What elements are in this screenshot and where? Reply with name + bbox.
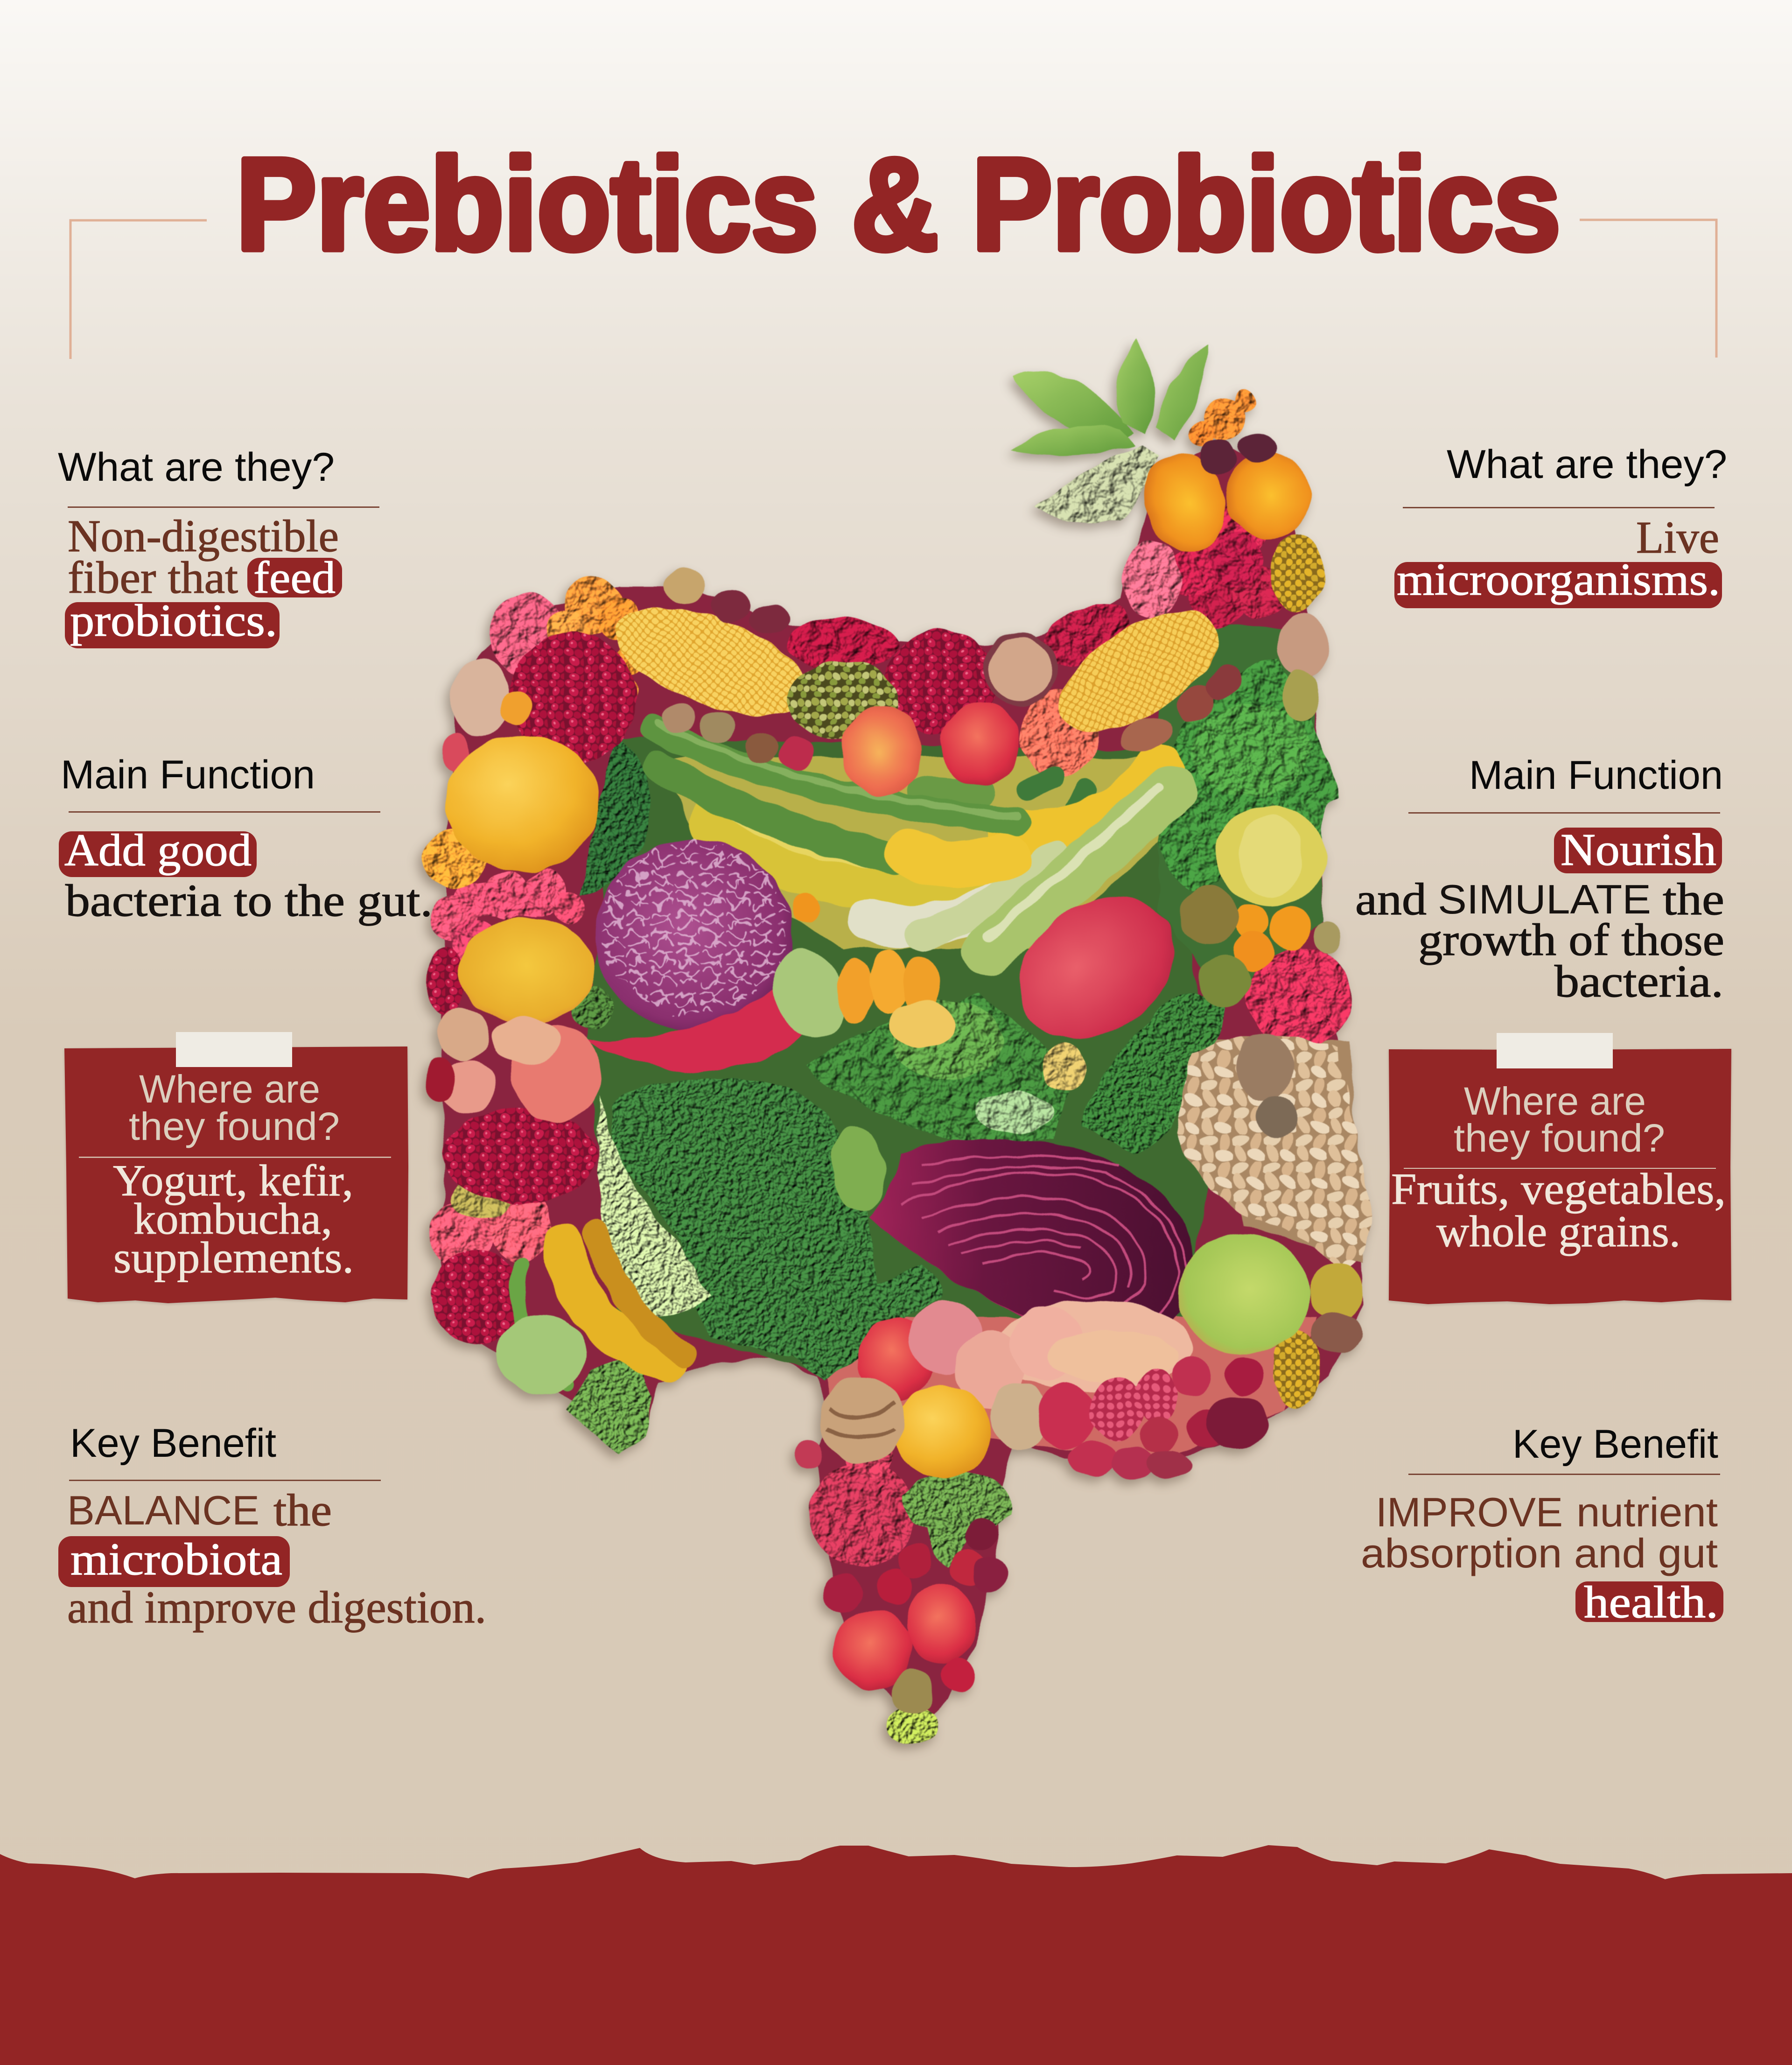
heading: main function: Main Function bbox=[61, 752, 315, 797]
panel: where found note, right bbox=[1389, 1033, 1731, 1304]
heading: what are they: What are they? bbox=[58, 445, 335, 490]
fruits and vegetables smooth pieces bbox=[425, 433, 1340, 1715]
panel: where found note, left: kombucha, bbox=[133, 1194, 332, 1243]
red cabbage whole bbox=[595, 839, 793, 1031]
text: balance: BALANCE bbox=[67, 1487, 259, 1533]
text: improve nutrient: IMPROVE bbox=[1376, 1489, 1563, 1535]
text: growth of those: growth of those bbox=[1418, 915, 1724, 965]
panel: prebiotic definition, left bbox=[58, 445, 379, 648]
panel: where found note, left: supplements. bbox=[113, 1233, 354, 1282]
berries bbox=[794, 1356, 1269, 1693]
stems, beans and bananas bbox=[518, 723, 1172, 1383]
heading: key benefit: Key Benefit bbox=[1512, 1422, 1718, 1467]
heading: what are they: What are they? bbox=[1447, 442, 1727, 487]
note heading: Where are bbox=[1464, 1079, 1646, 1123]
crumpled and leafy produce bbox=[423, 390, 1352, 1567]
top leaves bbox=[1010, 340, 1209, 455]
panel: key benefit, left bbox=[58, 1421, 486, 1632]
heading: main function: Main Function bbox=[1469, 753, 1723, 798]
panel: key benefit, right: nutrient bbox=[1576, 1489, 1718, 1535]
seeds, corn, grains bbox=[427, 534, 1372, 1409]
gut base regions bbox=[441, 441, 1363, 1725]
text: bacteria: bacteria. bbox=[1554, 956, 1723, 1006]
panel: main function, right: the bbox=[1663, 874, 1724, 924]
panel: key benefit, left: the bbox=[273, 1485, 332, 1535]
panel: main function, right bbox=[1355, 753, 1724, 1006]
text: add good: Add good bbox=[64, 825, 252, 875]
title bracket right bbox=[1580, 220, 1716, 358]
tape bbox=[176, 1032, 292, 1067]
text: absorption and gut: absorption and gut bbox=[1361, 1530, 1718, 1576]
panel: where found note, right: they found? bbox=[1454, 1116, 1665, 1160]
panel: where found note, left: they found? bbox=[129, 1104, 340, 1148]
text: feed: feed bbox=[253, 553, 336, 603]
panel: main function, left bbox=[59, 752, 433, 926]
text: health: health. bbox=[1584, 1577, 1718, 1627]
text: and simulate the: and bbox=[1355, 874, 1427, 924]
text: non-digestible: Non-digestible bbox=[68, 511, 339, 561]
panel: where found note, right: whole grains. bbox=[1436, 1207, 1680, 1256]
panel: where found note, left bbox=[64, 1032, 408, 1303]
panel: main function, right: SIMULATE bbox=[1438, 876, 1651, 922]
text: bacteria to the gut: bacteria to the gut. bbox=[65, 876, 433, 926]
panel: key benefit, right bbox=[1361, 1422, 1723, 1627]
text: microorganisms: microorganisms. bbox=[1397, 555, 1720, 604]
text: and improve digestion: and improve digestion. bbox=[67, 1582, 486, 1632]
text: microbiota: microbiota bbox=[70, 1534, 282, 1584]
note heading: Where are bbox=[139, 1067, 320, 1111]
tape bbox=[1497, 1033, 1613, 1068]
bottom torn band bbox=[0, 1845, 1792, 2065]
note body: Yogurt, kefir, bbox=[113, 1156, 353, 1205]
text: fiber that: fiber that bbox=[68, 553, 238, 603]
text: probiotics: probiotics. bbox=[70, 596, 277, 646]
title bracket left bbox=[70, 220, 207, 359]
title: Prebiotics & Probiotics bbox=[236, 132, 1561, 277]
note body: Fruits, vegetables, bbox=[1391, 1164, 1726, 1214]
text: live: Live bbox=[1636, 513, 1719, 562]
panel: probiotic definition, right bbox=[1394, 442, 1727, 608]
text: nourish: Nourish bbox=[1561, 825, 1716, 875]
broccoli and kale bbox=[566, 738, 1225, 1745]
heading: key benefit: Key Benefit bbox=[70, 1421, 276, 1466]
gut illustration made of fruit and vegetables bbox=[423, 340, 1372, 1745]
cut red cabbage bbox=[869, 1139, 1195, 1341]
